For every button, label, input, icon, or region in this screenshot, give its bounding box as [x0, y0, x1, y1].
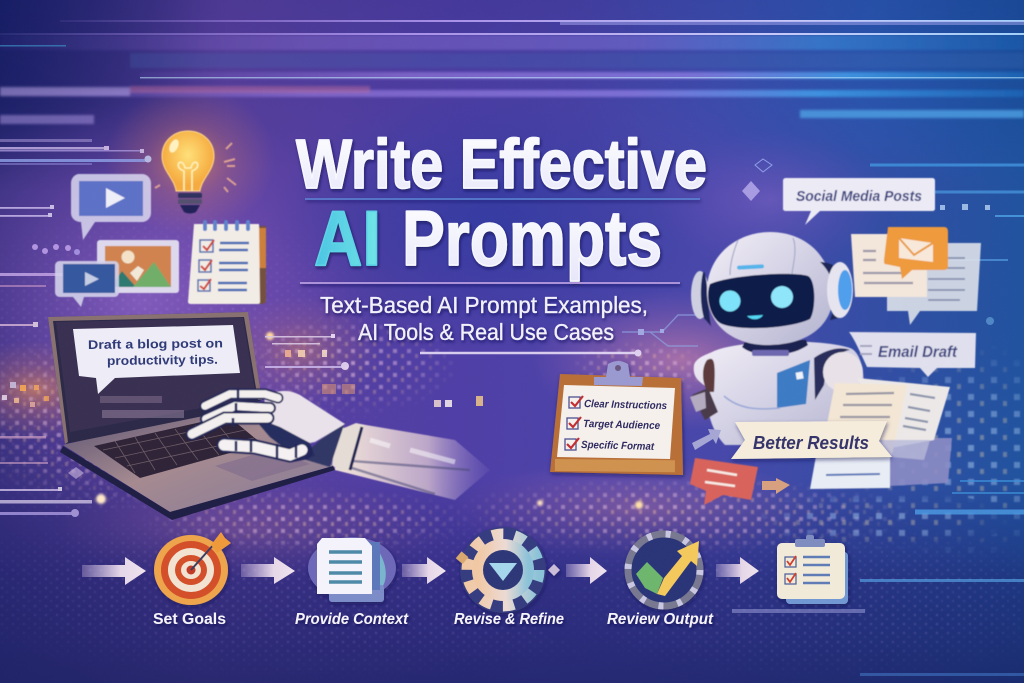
right circuit lines	[265, 159, 1024, 676]
robot palm	[262, 391, 345, 445]
email draft bubble	[849, 332, 976, 377]
clipboard checklist: Target Audience	[583, 418, 660, 432]
output document cluster	[851, 227, 981, 325]
icon: light bulb	[155, 131, 236, 214]
step: review output check	[626, 532, 702, 608]
subtitle	[320, 292, 648, 345]
subtitle: AI Tools & Real Use Cases	[358, 319, 614, 345]
email draft bubble: Email Draft	[878, 344, 958, 361]
step label: provide context: Provide Context	[295, 611, 409, 628]
robot forearm	[335, 424, 490, 500]
prompt bubble	[73, 325, 240, 394]
left circuit lines	[0, 139, 152, 517]
prompt bubble: productivity tips.	[107, 353, 218, 368]
step label: review output: Review Output	[607, 611, 714, 628]
flow arrow 4	[566, 557, 607, 584]
step label: set goals: Set Goals	[153, 611, 226, 628]
clipboard checklist: Clear Instructions	[584, 398, 667, 412]
clipboard checklist	[550, 361, 683, 475]
robot eyes	[720, 290, 740, 312]
icon: landscape image card	[97, 240, 179, 293]
top light streaks	[0, 20, 1024, 124]
laptop screen	[48, 312, 262, 444]
social media posts bubble	[783, 178, 935, 225]
result document stack	[810, 378, 952, 489]
process flow	[82, 527, 848, 628]
final clipboard icon	[777, 535, 848, 604]
orange message icon	[884, 227, 948, 279]
step: revise and refine gear	[456, 527, 560, 613]
prompt bubble: Draft a blog post on	[88, 336, 223, 352]
better results ribbon	[731, 421, 892, 459]
robot hand	[192, 390, 490, 500]
laptop keyboard	[94, 416, 262, 478]
clipboard checklist: Specific Format	[581, 439, 655, 453]
laptop	[48, 312, 335, 520]
step: provide context document	[308, 537, 396, 602]
small orange arrow	[762, 478, 790, 494]
laptop base	[63, 400, 333, 512]
step: set goals target	[154, 532, 231, 605]
red message icon	[690, 458, 758, 505]
clipboard clip	[594, 361, 643, 386]
icon: video speech bubble	[71, 174, 151, 240]
flow arrow 3	[402, 557, 446, 584]
better results ribbon: Better Results	[753, 433, 869, 453]
title: Write Effective	[296, 125, 707, 203]
robot	[690, 232, 864, 445]
robot body	[694, 342, 864, 445]
flow arrow 5	[716, 557, 759, 584]
robot wrist	[300, 422, 345, 467]
small arrow beside robot	[692, 429, 721, 450]
subtitle: Text-Based AI Prompt Examples,	[320, 292, 648, 318]
social media posts bubble: Social Media Posts	[796, 189, 922, 205]
flow arrow 2	[241, 557, 295, 584]
robot head	[707, 232, 833, 345]
icon: small video card	[55, 261, 119, 307]
robot ear left	[691, 271, 709, 319]
robot neck	[742, 340, 808, 355]
icon: checklist notepad	[188, 220, 266, 304]
flow arrow 1	[82, 557, 146, 585]
robot fingers	[192, 394, 305, 455]
title	[296, 125, 707, 284]
title: AI	[314, 194, 381, 282]
step label: revise and refine: Revise & Refine	[454, 611, 564, 628]
clipboard paper	[557, 385, 675, 459]
robot ear right	[820, 262, 852, 320]
title: Prompts	[402, 194, 662, 282]
robot visor	[708, 274, 814, 328]
